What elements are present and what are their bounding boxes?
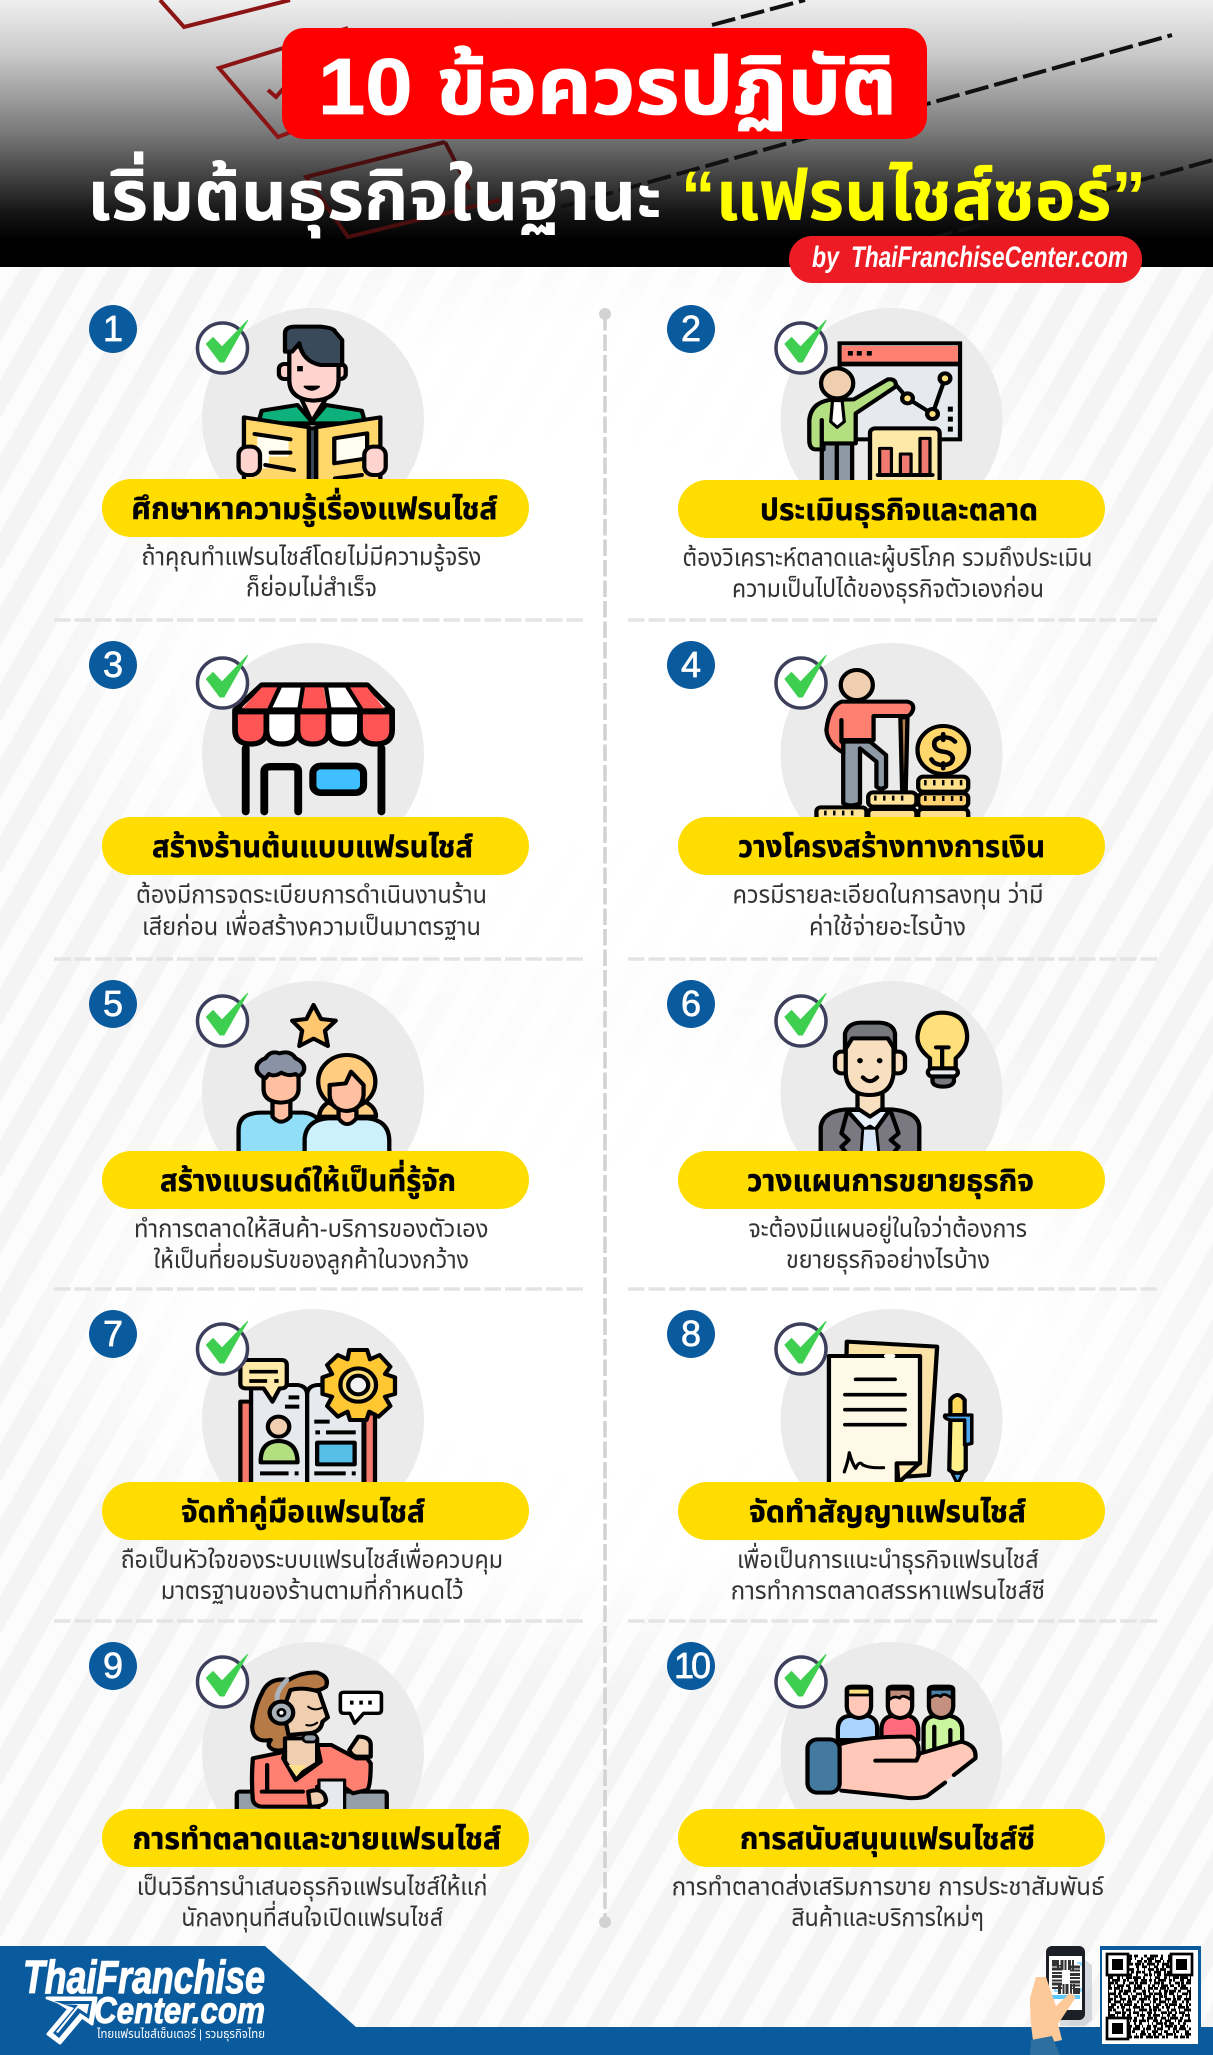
icon: check mark (198, 1654, 248, 1707)
heading pill (102, 1809, 529, 1867)
description (134, 1215, 488, 1275)
description: ความเป็นไปได้ของธุรกิจตัวเองก่อน (732, 575, 1044, 604)
description: ถือเป็นหัวใจของระบบแฟรนไชส์เพื่อควบคุม (121, 1542, 503, 1575)
icon: call center agent (237, 1673, 387, 1815)
description: นักลงทุนที่สนใจเปิดแฟรนไชส์ (181, 1900, 443, 1933)
footer logo: ThaiFranchise (23, 1951, 265, 2003)
icon: man on coin stacks (816, 670, 969, 822)
description: ขยายธุรกิจอย่างไรบ้าง (786, 1246, 990, 1275)
icon: presenter with chart (809, 343, 960, 487)
icon: check mark (776, 1654, 826, 1707)
icon: check mark (198, 1322, 248, 1374)
description: ควรมีรายละเอียดในการลงทุน ว่ามี (732, 881, 1044, 910)
heading pill (102, 479, 529, 537)
heading pill (678, 1151, 1105, 1209)
icon: check mark (776, 320, 826, 373)
heading pill: วางแผนการขยายธุรกิจ (747, 1165, 1034, 1199)
panel: step 9 (89, 1642, 529, 1933)
description: มาตรฐานของร้านตามที่กำหนดไว้ (161, 1573, 464, 1605)
panel: step 6 (667, 980, 1105, 1275)
description (731, 1542, 1045, 1605)
website badge: by (812, 241, 840, 274)
subtitle: “แฟรนไชส์ซอร์” (681, 157, 1146, 235)
footer logo: Center.com (94, 1990, 265, 2031)
icon: check mark (776, 994, 826, 1046)
heading pill: สร้างร้านต้นแบบแฟรนไชส์ (152, 831, 473, 864)
heading pill (678, 1482, 1105, 1540)
icon: two people with star (239, 1005, 389, 1153)
heading pill (102, 817, 529, 875)
description: สินค้าและบริการใหม่ๆ (791, 1904, 984, 1932)
footer logo (23, 1951, 265, 2043)
number badge: 1 (103, 308, 123, 349)
heading pill (678, 480, 1105, 538)
number badge: 2 (681, 308, 701, 349)
description (672, 1873, 1104, 1932)
heading pill: จัดทำสัญญาแฟรนไชส์ (749, 1496, 1026, 1529)
icon: businessman with light bulb (821, 1013, 967, 1153)
heading pill (102, 1151, 529, 1209)
heading pill (678, 1809, 1105, 1867)
number badge: 3 (103, 644, 123, 685)
description: การทำการตลาดสรรหาแฟรนไชส์ซี (731, 1577, 1045, 1605)
number badge (667, 641, 715, 689)
panel: step 10 (667, 1642, 1105, 1932)
heading pill: สร้างแบรนด์ให้เป็นที่รู้จัก (160, 1159, 456, 1199)
number badge: 4 (681, 644, 701, 685)
footer logo: ไทยแฟรนไชส์เซ็นเตอร์ | รวมธุรกิจไทย (96, 2027, 265, 2041)
icon: man reading (239, 327, 386, 483)
title badge: 10 ข้อควรปฏิบัติ (318, 42, 897, 131)
description: ค่าใช้จ่ายอะไรบ้าง (809, 913, 966, 941)
number badge: 9 (103, 1645, 123, 1686)
panel: step 7 (89, 1309, 529, 1605)
icon: check mark (198, 656, 248, 708)
icon: manual with gear (240, 1350, 395, 1485)
number badge (89, 1310, 137, 1358)
number badge (667, 980, 715, 1028)
icon: check mark (776, 656, 826, 708)
description: ก็ย่อมไม่สำเร็จ (246, 574, 377, 602)
QR code (1100, 1946, 1201, 2055)
number badge: 7 (103, 1313, 123, 1354)
number badge (89, 305, 137, 353)
description: เป็นวิธีการนำเสนอธุรกิจแฟรนไชส์ให้แก่ (137, 1873, 488, 1902)
heading pill: ประเมินธุรกิจและตลาด (760, 494, 1038, 528)
icon: hand holding phone (1030, 1946, 1092, 2055)
number badge: 5 (103, 983, 123, 1024)
website badge: ThaiFranchiseCenter.com (851, 241, 1128, 274)
title badge (282, 28, 927, 139)
heading pill: การสนับสนุนแฟรนไชส์ซี (740, 1823, 1035, 1857)
description (121, 1542, 503, 1605)
header band (0, 0, 1213, 267)
description: ถ้าคุณทำแฟรนไชส์โดยไม่มีความรู้จริง (141, 543, 481, 572)
number badge (89, 980, 137, 1028)
icon: contract and pen (829, 1342, 972, 1485)
number badge (667, 1310, 715, 1358)
description: จะต้องมีแผนอยู่ในใจว่าต้องการ (748, 1215, 1027, 1244)
number badge (89, 1642, 137, 1690)
description (136, 881, 487, 941)
heading pill (102, 1482, 529, 1540)
center dashed divider (599, 308, 611, 1928)
icon: check mark (198, 320, 248, 373)
number badge (667, 1642, 715, 1690)
website badge (789, 236, 1142, 283)
description (748, 1215, 1027, 1275)
description (137, 1873, 488, 1933)
panel: step 8 (667, 1309, 1105, 1605)
panel: step 1 (89, 305, 529, 602)
description (732, 881, 1044, 941)
description: ให้เป็นที่ยอมรับของลูกค้าในวงกว้าง (154, 1242, 469, 1275)
heading pill: การทำตลาดและขายแฟรนไชส์ (132, 1823, 501, 1856)
heading pill: ศึกษาหาความรู้เรื่องแฟรนไชส์ (131, 487, 498, 527)
row dividers (54, 620, 1158, 1621)
icon: logo arrow (47, 1998, 96, 2043)
description: ทำการตลาดให้สินค้า-บริการของตัวเอง (134, 1215, 488, 1243)
icon: shop front (235, 685, 392, 812)
subtitle: เริ่มต้นธุรกิจในฐานะ (87, 151, 662, 238)
number badge: 10 (674, 1645, 710, 1686)
heading pill (678, 817, 1105, 875)
description: เพื่อเป็นการแนะนำธุรกิจแฟรนไชส์ (737, 1542, 1039, 1575)
number badge: 6 (681, 983, 701, 1024)
description: ต้องวิเคราะห์ตลาดและผู้บริโภค รวมถึงประเมิน (682, 544, 1092, 573)
number badge (667, 305, 715, 353)
icon: check mark (776, 1322, 826, 1374)
subtitle (87, 151, 1146, 238)
icon: hand holding people (807, 1687, 976, 1798)
description (141, 543, 481, 602)
panel: step 5 (89, 980, 529, 1275)
description: ต้องมีการจดระเบียบการดำเนินงานร้าน (136, 881, 487, 909)
number badge (89, 641, 137, 689)
description (682, 544, 1092, 604)
description: เสียก่อน เพื่อสร้างความเป็นมาตรฐาน (142, 909, 481, 941)
panel: step 4 (667, 641, 1105, 941)
panel: step 2 (667, 305, 1105, 604)
heading pill: วางโครงสร้างทางการเงิน (738, 831, 1045, 864)
description: การทำตลาดส่งเสริมการขาย การประชาสัมพันธ์ (672, 1873, 1104, 1901)
footer band (0, 1946, 1213, 2055)
number badge: 8 (681, 1313, 701, 1354)
panel: step 3 (89, 641, 529, 941)
icon: check mark (198, 994, 248, 1046)
heading pill: จัดทำคู่มือแฟรนไชส์ (181, 1496, 425, 1530)
